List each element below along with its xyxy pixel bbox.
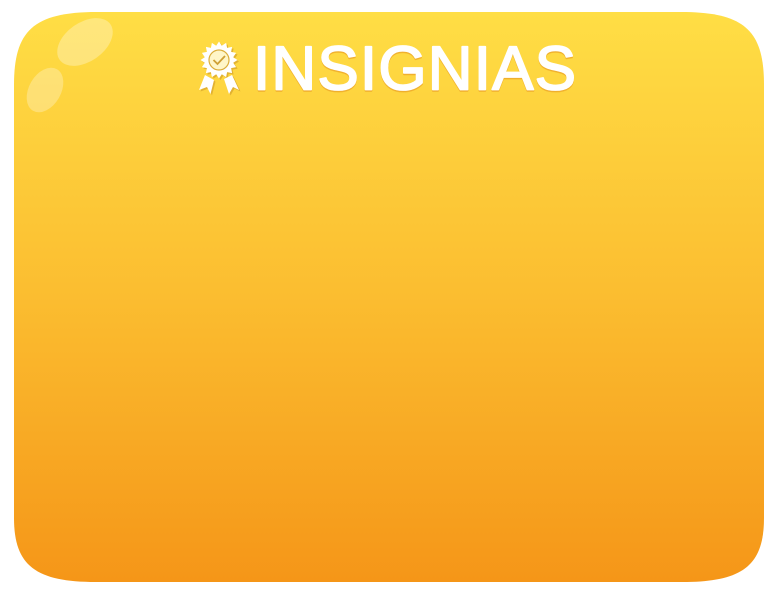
check mark	[214, 56, 225, 64]
ribbon tails	[199, 75, 214, 94]
seal ring	[209, 50, 229, 70]
decorative highlight: upper glossy ellipse	[48, 8, 122, 76]
title	[253, 34, 576, 105]
icon: award ribbon badge	[199, 42, 240, 96]
title shadow: INSIGNIAS	[253, 36, 576, 105]
decorative highlight: lower glossy ellipse	[19, 61, 71, 119]
seal	[200, 42, 238, 78]
title text: INSIGNIAS	[253, 34, 576, 104]
icon shadow	[200, 43, 240, 96]
